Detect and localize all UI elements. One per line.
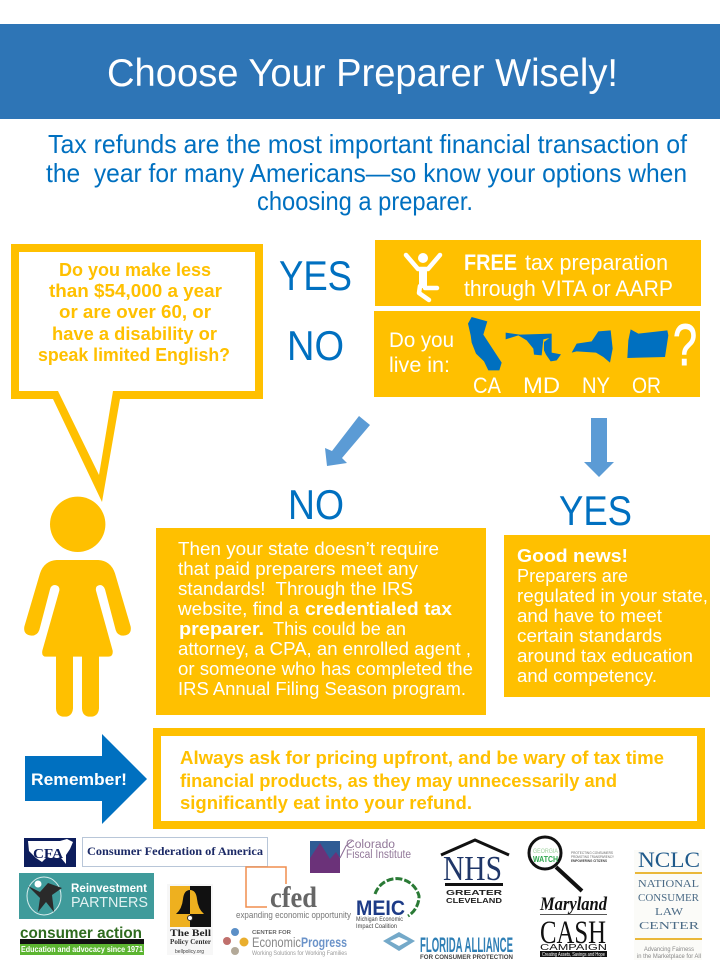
NO label top: NO [287, 322, 344, 369]
panel: free tax preparation [375, 240, 701, 306]
intro text [46, 129, 688, 216]
panel: no, find credentialed preparer: credentialed tax [305, 599, 452, 619]
logo: Georgia Watch: EMPOWERING CITIZENS [571, 859, 608, 863]
panel: free tax preparation: through VITA or AARP [464, 276, 673, 301]
NO label: NO [288, 481, 344, 528]
logo: Georgia Watch: PROMOTING TRANSPARENCY [571, 855, 615, 859]
logo: MEIC: Impact Coalition [356, 924, 397, 930]
panel: yes, good news: regulated in your state, [517, 586, 708, 606]
logo: Colorado Fiscal Institute: Colorado [346, 839, 395, 851]
logo: NCLC: in the Marketplace for All [637, 954, 701, 960]
logo: Colorado Fiscal Institute: Fiscal Institute [346, 849, 411, 861]
logo: consumer action: Education and advocacy since 1971 [21, 944, 143, 954]
panel: free tax preparation: FREE [464, 250, 517, 275]
logo: The Bell Policy Center [167, 884, 213, 955]
panel: no, find credentialed preparer [156, 528, 486, 715]
speech bubble question: than $54,000 a year [49, 281, 222, 301]
panel: do you live in: CA [473, 373, 501, 398]
logo: Reinvestment Partners [19, 873, 154, 919]
callout: always ask for pricing [157, 732, 701, 825]
logo: Georgia Watch: PROTECTING CONSUMERS [571, 851, 614, 855]
logo: Maryland CASH Campaign [539, 894, 607, 958]
speech bubble question: speak limited English? [38, 345, 230, 365]
logo: NCLC: CENTER [639, 921, 699, 932]
icon: Maryland [506, 333, 561, 361]
logo: The Bell Policy Center: The Bell [170, 929, 211, 939]
panel: no, find credentialed preparer: website, find a [177, 599, 300, 619]
logo: Maryland CASH Campaign: Creating Assets, Savings and Hope [542, 952, 605, 958]
panel: yes, good news: Preparers are [517, 566, 628, 586]
logo: Consumer Federation of America [24, 838, 268, 867]
panel: yes, good news: around tax education [517, 646, 693, 666]
logo: cfed: cfed [270, 881, 317, 914]
logo: Center for Economic Progress: Working Solutions for Working Families [252, 951, 347, 957]
logo: Consumer Federation of America: Consumer Federation of America [87, 846, 263, 858]
logo: NHS Greater Cleveland [441, 840, 509, 905]
YES label: YES [559, 487, 632, 534]
logo: cfed [236, 867, 351, 921]
panel: no, find credentialed preparer: preparer. [179, 619, 264, 639]
arrow: down to YES [584, 418, 614, 477]
speech bubble question [11, 244, 263, 502]
panel: do you live in: ? [673, 313, 697, 378]
logo: The Bell Policy Center: Policy Center [170, 938, 211, 946]
logo: NHS Greater Cleveland: GREATER [446, 888, 503, 897]
logo: NCLC [634, 847, 702, 960]
logo: MEIC: MEIC [356, 897, 405, 920]
logo: Maryland CASH Campaign: Maryland [539, 894, 607, 915]
arrow: remember: Remember! [31, 770, 127, 789]
speech bubble question: Do you make less [59, 260, 211, 280]
logo: NHS Greater Cleveland: NHS [443, 849, 502, 888]
panel: no, find credentialed preparer: or someone who has completed the [178, 659, 473, 679]
intro text: the year for many Americans—so know your options when [46, 158, 687, 188]
panel: no, find credentialed preparer: Then your state doesn’t require [178, 539, 439, 559]
panel: no, find credentialed preparer: that paid preparers meet any [178, 559, 418, 579]
logo: Colorado Fiscal Institute [310, 839, 411, 873]
panel: do you live in: live in: [389, 354, 450, 377]
intro text: choosing a preparer. [257, 186, 473, 216]
logo: NCLC: NCLC [638, 847, 700, 872]
logo: NCLC: Advancing Fairness [644, 947, 694, 953]
panel: no, find credentialed preparer: standards! Through the IRS [178, 579, 413, 599]
intro text: Tax refunds are the most important financial transaction of [48, 129, 688, 159]
logo: cfed: expanding economic opportunity [236, 910, 351, 921]
logo: NCLC: NATIONAL [638, 879, 699, 890]
speech bubble question: have a disability or [52, 324, 217, 344]
speech bubble question: or are over 60, or [59, 302, 211, 322]
logo: Center for Economic Progress: Progress [301, 934, 347, 950]
panel: do you live in: NY [582, 373, 610, 398]
callout: always ask for pricing: significantly eat into your refund. [180, 793, 472, 813]
panel: yes, good news: Good news! [517, 546, 628, 566]
panel: yes, good news: certain standards [517, 626, 662, 646]
logo: Reinvestment Partners: Reinvestment [71, 881, 147, 895]
callout: always ask for pricing: Always ask for pricing upfront, and be wary of tax time [180, 748, 664, 768]
icon: Oregon [627, 329, 668, 358]
panel: free tax preparation: tax preparation [525, 250, 668, 275]
text: FLORIDA ALLIANCE [420, 934, 513, 957]
logo: Maryland CASH Campaign: CAMPAIGN [540, 943, 607, 952]
callout: always ask for pricing: financial products, as they may unnecessarily and [180, 771, 617, 791]
logo: consumer action [20, 925, 144, 955]
arrow: remember [25, 734, 147, 824]
panel: no, find credentialed preparer: attorney, a CPA, an enrolled agent , [178, 639, 471, 659]
panel: do you live in [374, 311, 700, 398]
icon: jumping person [406, 253, 440, 300]
panel: no, find credentialed preparer: IRS Annual Filing Season program. [178, 679, 466, 699]
logo: Consumer Federation of America: CFA [33, 847, 64, 862]
logo: MEIC: Michigan Economic [356, 917, 403, 923]
logo: Maryland CASH Campaign: CASH [540, 915, 606, 951]
panel: do you live in: Do you [389, 329, 454, 352]
YES label top: YES [279, 252, 352, 299]
logo: Georgia Watch: GEORGIA [533, 848, 559, 855]
logo: Reinvestment Partners: PARTNERS [71, 894, 148, 911]
logo: consumer action: consumer action [20, 925, 142, 942]
logo: Georgia Watch: WATCH [533, 855, 558, 864]
title banner [0, 24, 720, 119]
panel: do you live in: OR [632, 373, 661, 398]
logo: MEIC [356, 879, 419, 930]
panel: do you live in: MD [523, 373, 560, 398]
icon: New York [572, 330, 613, 363]
icon: woman figure [24, 497, 131, 717]
logo: Center for Economic Progress: Economic [252, 934, 301, 950]
icon: California [468, 317, 502, 370]
panel: yes, good news [504, 535, 710, 697]
panel: no, find credentialed preparer: This could be an [273, 619, 406, 639]
logo: NCLC: LAW [655, 907, 683, 918]
panel: yes, good news: and competency. [517, 666, 657, 686]
panel: yes, good news: and have to meet [517, 606, 662, 626]
arrow: down left to NO [325, 416, 370, 466]
logo: Florida Alliance [383, 932, 513, 960]
logo: Center for Economic Progress: CENTER FOR [252, 930, 291, 936]
logo: Center for Economic Progress [223, 928, 347, 957]
logo: NHS Greater Cleveland: CLEVELAND [446, 896, 503, 905]
logo: Georgia Watch [529, 837, 615, 891]
title banner: Choose Your Preparer Wisely! [107, 52, 618, 95]
logo: The Bell Policy Center: bellpolicy.org [175, 949, 204, 955]
logo: NCLC: CONSUMER [638, 893, 699, 904]
